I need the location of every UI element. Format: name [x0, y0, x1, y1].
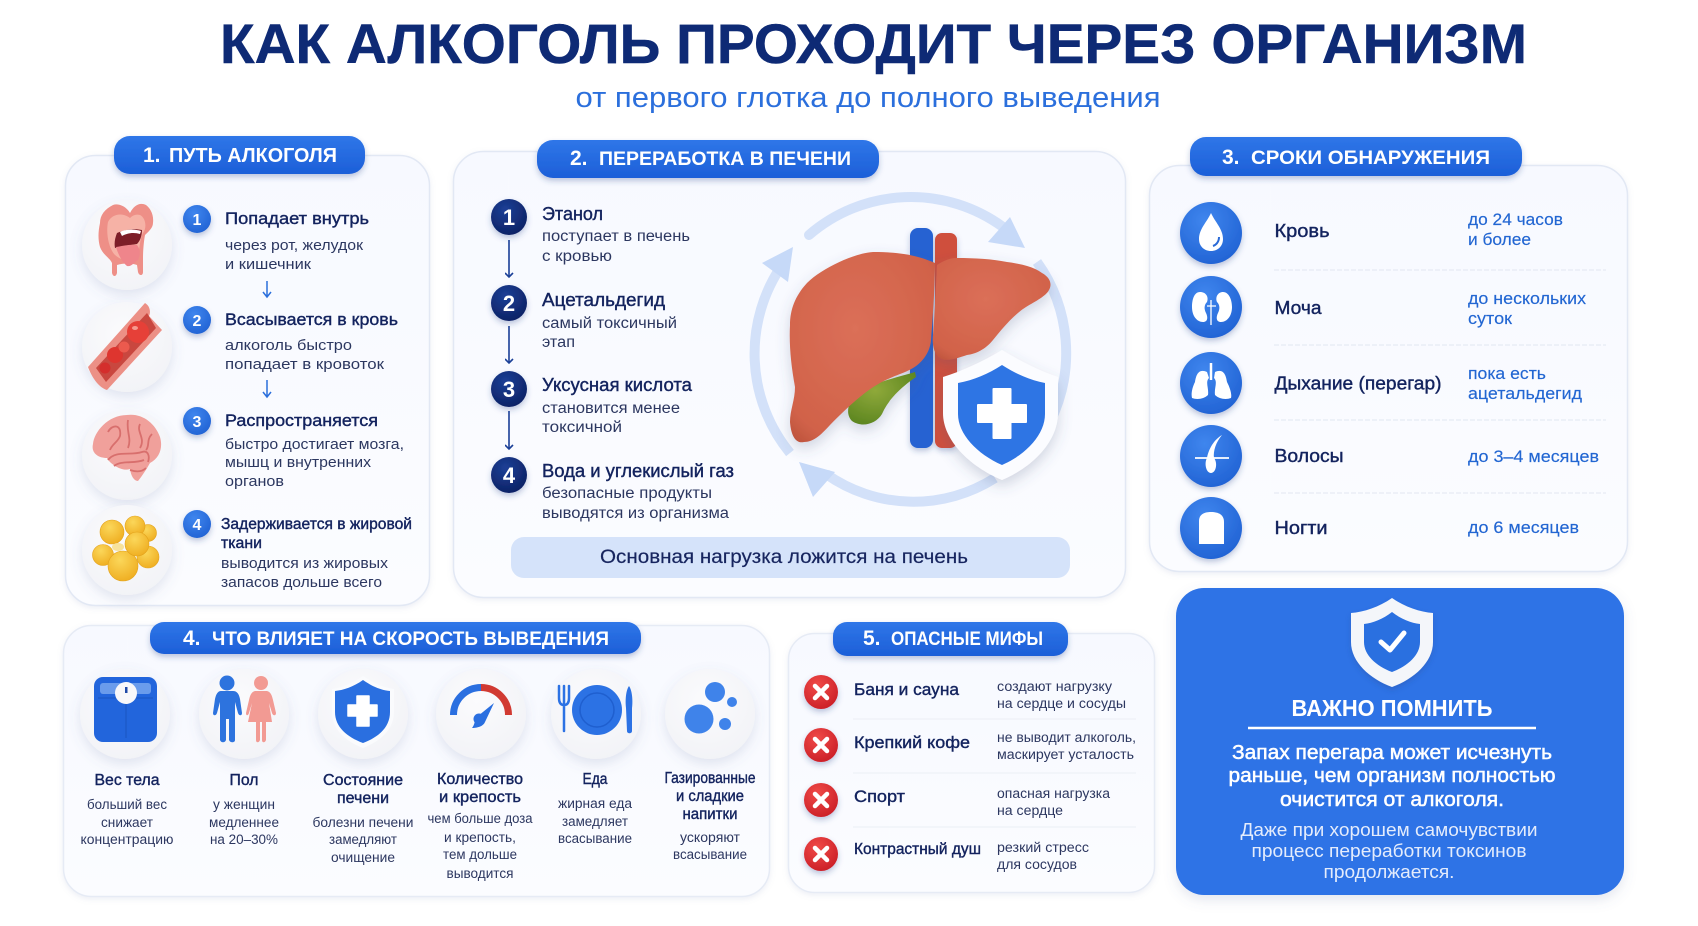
liver illustration [755, 197, 1066, 502]
heading: panel 3: СРОКИ ОБНАРУЖЕНИЯ [1251, 147, 1490, 169]
step 4 [183, 510, 412, 591]
heading: panel 4: 4. [183, 627, 201, 650]
factor: fizzy drinks: напитки [682, 806, 738, 823]
step 2: попадает в кровоток [225, 356, 384, 373]
myth: sport: опасная нагрузка [997, 786, 1111, 801]
step 4: запасов дольше всего [221, 574, 382, 591]
heading: panel 3 [1190, 137, 1522, 176]
icon: brain [82, 410, 172, 500]
factor: amount and strength: и крепость [439, 789, 521, 806]
main message: очистится от алкоголя. [1280, 789, 1504, 811]
icon: man and woman [199, 669, 289, 759]
step: ethanol: 1 [503, 205, 515, 230]
heading: panel 1 [114, 136, 365, 174]
row: nails [1180, 497, 1579, 559]
myth: strong coffee: не выводит алкоголь, [997, 730, 1136, 745]
step 1: 1 [193, 212, 202, 229]
step 3: быстро достигает мозга, [225, 436, 404, 453]
step: acetaldehyde: этап [542, 334, 575, 351]
icon: nail [1180, 497, 1242, 559]
heading: panel 4 [150, 622, 641, 654]
callout bar [511, 537, 1070, 578]
row: blood [1180, 202, 1563, 264]
icon: gauge [436, 669, 526, 759]
myth: sport [804, 783, 1111, 818]
step: water and CO2: Вода и углекислый газ [542, 461, 734, 481]
step: ethanol: с кровью [542, 248, 612, 265]
factor: liver condition: очищение [331, 850, 395, 865]
step: water and CO2: 4 [503, 463, 516, 488]
row: hair: до 3–4 месяцев [1468, 448, 1599, 466]
myth: contrast shower: для сосудов [997, 857, 1077, 872]
heading: ВАЖНО ПОМНИТЬ [1292, 695, 1492, 721]
step: acetic acid: токсичной [542, 419, 622, 436]
row: breath: Дыхание (перегар) [1274, 374, 1442, 394]
icon: shield [318, 669, 408, 759]
step 4: Задерживается в жировой [221, 516, 412, 533]
step 1: и кишечник [225, 256, 311, 273]
callout bar: Основная нагрузка ложится на печень [600, 547, 968, 568]
myth: bath and sauna: Баня и сауна [854, 680, 960, 699]
step 3: 3 [193, 414, 202, 431]
row: nails: Ногти [1274, 518, 1328, 538]
step: ethanol: поступает в печень [542, 228, 690, 245]
icon: kidneys [1180, 276, 1242, 338]
secondary message: Даже при хорошем самочувствии [1240, 820, 1538, 840]
arrow [508, 411, 510, 449]
factor: liver condition: Состояние [323, 772, 403, 789]
step 1: через рот, желудок [225, 237, 363, 254]
step 2: алкоголь быстро [225, 337, 352, 354]
heading: panel 2 [537, 140, 879, 178]
myth: sport: Спорт [854, 787, 905, 806]
factor: amount and strength: чем больше доза [428, 811, 533, 826]
step: water and CO2: безопасные продукты [542, 485, 712, 502]
row: hair [1180, 425, 1599, 487]
factor: sex: у женщин [213, 797, 275, 812]
factor: body weight: больший вес [87, 797, 167, 812]
step 2: Всасывается в кровь [225, 310, 398, 329]
row: blood: и более [1468, 231, 1531, 249]
step: acetic acid: становится менее [542, 400, 680, 417]
myth: contrast shower: Контрастный душ [854, 841, 981, 858]
step 4: ткани [221, 535, 262, 552]
panel: 2. liver processing [454, 140, 1126, 598]
icon: mouth [82, 200, 172, 290]
step: acetaldehyde: Ацетальдегид [542, 290, 666, 310]
step: water and CO2: выводятся из организма [542, 505, 729, 522]
myth: strong coffee: Крепкий кофе [854, 733, 970, 752]
heading: panel 2: 2. [570, 147, 588, 170]
row: breath [1180, 352, 1582, 414]
factor: liver condition [312, 669, 414, 865]
factor: amount and strength: тем дольше [443, 847, 517, 862]
cycle arrows [755, 197, 1066, 502]
factor: fizzy drinks: всасывание [673, 847, 747, 862]
row: urine [1180, 276, 1587, 338]
myth: strong coffee: маскирует усталость [997, 747, 1134, 762]
step 3: Распространяется [225, 411, 378, 430]
step: acetaldehyde: 2 [503, 291, 515, 316]
step 1: Попадает внутрь [225, 209, 369, 228]
main message: Запах перегара может исчезнуть [1232, 742, 1552, 764]
factor: food: жирная еда [558, 796, 632, 811]
row: blood: Кровь [1274, 221, 1330, 241]
factor: fizzy drinks: ускоряют [680, 830, 740, 845]
vessels [910, 228, 957, 448]
step: ethanol [491, 199, 690, 265]
icon: fat cells [82, 505, 172, 595]
factor: body weight: Вес тела [94, 772, 160, 789]
factor: fizzy drinks: и сладкие [676, 788, 744, 805]
factor: amount and strength: Количество [437, 771, 523, 788]
factor: liver condition: замедляют [329, 832, 397, 847]
secondary message: продолжается. [1324, 862, 1454, 882]
arrow [263, 281, 271, 297]
icon: hair [1180, 425, 1242, 487]
myth: contrast shower [804, 837, 1089, 872]
secondary message [1240, 820, 1538, 882]
icon: lungs [1180, 352, 1242, 414]
factor: food: замедляет [562, 814, 628, 829]
main message: раньше, чем организм полностью [1228, 765, 1556, 787]
icon: blood vessel [82, 302, 172, 392]
step 2 [183, 306, 398, 373]
title: КАК АЛКОГОЛЬ ПРОХОДИТ ЧЕРЕЗ ОРГАНИЗМ [220, 12, 1527, 75]
arrow [508, 326, 510, 363]
row: breath: ацетальдегид [1468, 385, 1582, 403]
factor: body weight [80, 669, 174, 847]
icon: drop [1180, 202, 1242, 264]
factor: sex: на 20–30% [210, 832, 278, 847]
heading: panel 1: ПУТЬ АЛКОГОЛЯ [169, 145, 337, 167]
myth: strong coffee [804, 728, 1136, 762]
factor: amount and strength [428, 669, 533, 881]
subtitle: от первого глотка до полного выведения [576, 82, 1160, 114]
factor: amount and strength: и крепость, [444, 830, 516, 845]
factor: liver condition: печени [337, 790, 389, 807]
step: water and CO2 [491, 457, 734, 522]
myth: contrast shower: резкий стресс [997, 840, 1089, 855]
factor: fizzy drinks: Газированные [664, 770, 756, 787]
factor: body weight: снижает [101, 815, 153, 830]
factor: food: Еда [582, 771, 608, 788]
liver lobes [790, 252, 1051, 442]
step: acetic acid [491, 371, 693, 436]
heading: panel 2: ПЕРЕРАБОТКА В ПЕЧЕНИ [599, 148, 851, 170]
step: acetaldehyde: самый токсичный [542, 315, 677, 332]
step 4: 4 [193, 517, 202, 534]
step: acetic acid: Уксусная кислота [542, 375, 693, 395]
step: acetaldehyde [491, 285, 677, 351]
factor: sex: Пол [230, 772, 258, 789]
panel: 3. detection times [1150, 137, 1628, 572]
shield [943, 350, 1058, 480]
heading: panel 4: ЧТО ВЛИЯЕТ НА СКОРОСТЬ ВЫВЕДЕНИЯ [212, 628, 609, 650]
myth: sport: на сердце [997, 803, 1063, 818]
panel: 4. elimination factors [64, 622, 770, 896]
panel: 5. dangerous myths [788, 622, 1154, 892]
heading: panel 5: 5. [863, 627, 881, 650]
heading: panel 3: 3. [1222, 146, 1240, 169]
step 3 [183, 407, 404, 490]
arrow [508, 240, 510, 277]
step: acetic acid: 3 [503, 377, 515, 402]
icon: bubbles [665, 669, 755, 759]
step 2: 2 [193, 313, 202, 330]
heading: panel 1: 1. [143, 144, 161, 167]
step: ethanol: Этанол [542, 204, 603, 224]
icon: check shield [1351, 598, 1433, 687]
factor: amount and strength: выводится [446, 866, 514, 881]
icon: scale [80, 669, 170, 759]
factor: food [551, 669, 641, 846]
icon: plate [551, 669, 641, 759]
step 1 [183, 205, 369, 273]
heading: panel 5 [833, 622, 1068, 656]
panel: 1. alcohol path [66, 136, 430, 606]
row: blood: до 24 часов [1468, 211, 1563, 229]
step 4: выводится из жировых [221, 555, 389, 572]
step 3: мышц и внутренних [225, 454, 372, 471]
main message [1228, 742, 1556, 811]
row: urine: до нескольких [1468, 290, 1587, 308]
row: hair: Волосы [1274, 446, 1344, 466]
factor: sex: медленнее [209, 815, 279, 830]
secondary message: процесс переработки токсинов [1252, 841, 1526, 861]
factor: food: всасывание [558, 831, 632, 846]
myth: bath and sauna: на сердце и сосуды [997, 696, 1126, 711]
factor: body weight: концентрацию [80, 832, 174, 847]
row: nails: до 6 месяцев [1468, 519, 1579, 537]
myth: bath and sauna [804, 675, 1126, 711]
arrow [263, 380, 271, 397]
row: urine: суток [1468, 310, 1513, 328]
heading: panel 5: ОПАСНЫЕ МИФЫ [891, 629, 1043, 650]
callout: important to remember [1176, 588, 1624, 895]
myth: bath and sauna: создают нагрузку [997, 679, 1112, 694]
row: urine: Моча [1274, 298, 1323, 318]
step 3: органов [225, 473, 284, 490]
factor: fizzy drinks [664, 669, 756, 862]
factor: liver condition: болезни печени [312, 815, 414, 830]
factor: sex [199, 669, 289, 847]
row: breath: пока есть [1468, 365, 1546, 383]
